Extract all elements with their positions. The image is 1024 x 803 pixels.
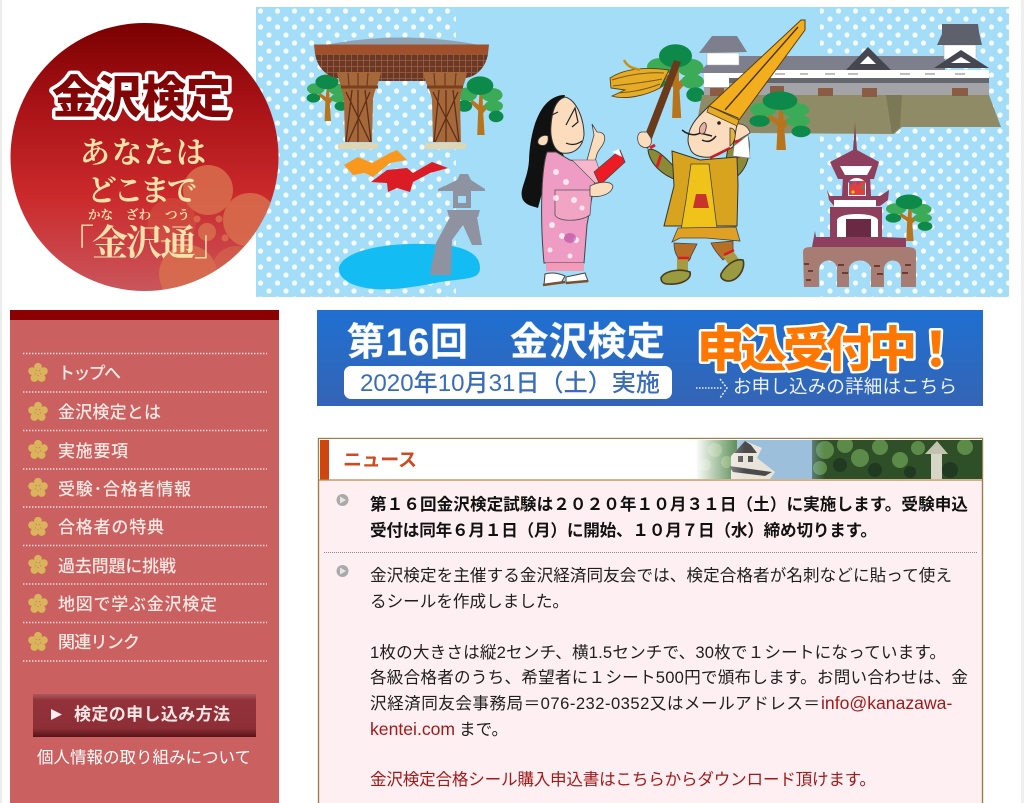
nav item: 金沢検定とは	[58, 403, 161, 422]
tagline: あなたは	[80, 137, 206, 170]
icon: pine tree by shrine	[886, 195, 932, 241]
application button: 検定の申し込み方法	[74, 704, 230, 724]
news photo	[695, 437, 982, 479]
application button	[33, 694, 256, 737]
character: woman in kimono	[522, 95, 625, 285]
nav item: トップへ	[58, 364, 121, 383]
nav item: 実施要項	[58, 442, 128, 461]
tagline: かな	[88, 208, 113, 222]
news heading: ニュース	[343, 450, 417, 471]
icon: red maple shape	[371, 162, 448, 192]
icon: Kotoji stone lantern	[430, 174, 485, 275]
center gable	[846, 47, 891, 70]
applications open: 申込受付中！	[697, 324, 960, 377]
icon: Kanazawa castle	[646, 24, 1001, 134]
news item 1: 第１６回金沢検定試験は２０２０年１０月３１日（土）に実施します。受験申込	[370, 494, 968, 514]
icon: plum blossom	[148, 165, 270, 290]
nav item: 受験･合格者情報	[58, 480, 191, 499]
navigation menu	[28, 363, 217, 652]
news header	[319, 437, 982, 480]
logo circle	[10, 23, 278, 303]
nav item: 過去問題に挑戦	[58, 557, 176, 576]
icon: dotted arrow	[696, 379, 727, 398]
nav item	[28, 632, 140, 652]
character: samurai Maeda	[610, 20, 805, 284]
news item 2: kentei.com	[370, 719, 455, 739]
news item 2: 沢経済同友会事務局＝076-232-0352又はメールアドレス＝	[370, 694, 820, 713]
news item 1: 受付は同年６月１日（月）に開始、１０月７日（水）締め切ります。	[370, 520, 877, 540]
download link: 金沢検定合格シール購入申込書はこちらからダウンロード頂けます。	[370, 770, 876, 789]
nav item: 地図で学ぶ金沢検定	[58, 595, 217, 614]
tagline: ざわ	[126, 208, 151, 222]
exam date pill: 2020年10月31日（土）実施	[360, 370, 660, 397]
news item 2: るシールを作成しました。	[370, 592, 569, 611]
nav item: 関連リンク	[58, 633, 140, 652]
icon: bullet	[336, 565, 348, 577]
news item 1	[336, 494, 968, 540]
promo title	[347, 321, 665, 364]
panel: news	[318, 437, 982, 803]
news item 2	[336, 565, 968, 789]
tagline	[58, 137, 230, 263]
news item 2: info@kanazawa-	[821, 693, 952, 713]
promo title: 第16回	[347, 322, 468, 364]
news item 2: 各級合格者のうち、希望者に１シート500円で頒布します。お問い合わせは、金	[370, 668, 968, 687]
nav item: 合格者の特典	[58, 518, 164, 537]
news item 2: 金沢検定を主催する金沢経済同友会では、検定合格者が名刺などに貼って使え	[370, 566, 952, 585]
right tower	[934, 24, 989, 68]
icon: pine tree by castle	[749, 91, 811, 150]
icon: pond	[339, 244, 480, 289]
promo banner	[317, 310, 983, 406]
nav item	[28, 363, 121, 383]
header illustration banner	[256, 7, 1009, 297]
icon: pine trees by the gate	[307, 75, 503, 135]
left tower	[699, 36, 747, 87]
icon: Tsuzumi gate	[314, 38, 489, 149]
tagline: どこまで	[87, 175, 197, 208]
promo title: 金沢検定	[510, 321, 665, 364]
tagline: つう	[165, 208, 190, 222]
news item 2: 1枚の大きさは縦2センチ、横1.5センチで、30枚で１シートになっています。	[370, 643, 946, 662]
sidebar panel	[10, 310, 279, 803]
nav item	[28, 440, 128, 461]
privacy link: 個人情報の取り組みについて	[37, 748, 251, 767]
details link: お申し込みの詳細はこちら	[733, 376, 957, 397]
icon: Oyama shrine gate	[803, 122, 916, 287]
icon: bullet	[336, 494, 348, 506]
tagline: 「金沢通」	[58, 223, 230, 263]
icon: orange maple shape	[344, 150, 407, 177]
heading: Kanazawa Kentei: 金沢検定	[52, 72, 231, 123]
news item 2: まで。	[459, 720, 508, 739]
